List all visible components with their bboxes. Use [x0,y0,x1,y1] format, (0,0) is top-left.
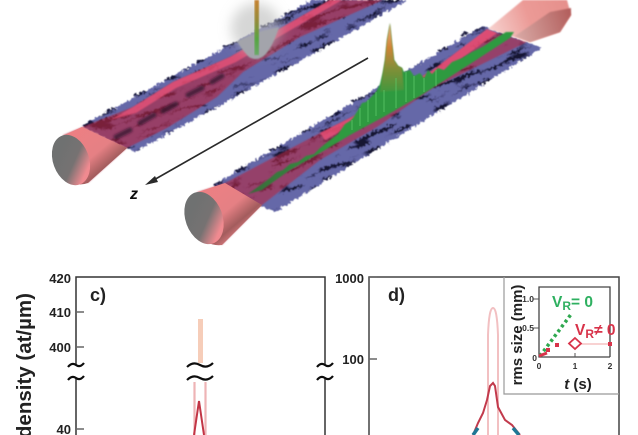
panel d: log density chart [335,271,619,435]
label VR = 0: = 0 [571,294,593,311]
arrow: z axis [145,58,368,185]
panel label c: c) [90,285,106,305]
y axis labels: 400 [49,340,71,355]
green profile ridges [352,70,436,130]
inset x tick labels: 2 [608,361,613,371]
inset panel [504,277,619,394]
beam exit flare [488,0,571,42]
blue density strip with noise [212,26,542,212]
experimental points [473,428,519,435]
panel c: density chart [13,271,333,435]
evolved density curve [473,383,520,435]
y axis ticks [76,312,84,429]
initial density curve [488,308,498,435]
beam end cap [45,129,97,191]
panel: lower atom cloud strip [184,0,572,246]
inset y tick labels: 1.0 [522,294,534,304]
y axis labels: 100 [342,352,364,367]
gray dip [237,27,279,59]
inset x axis title: t (s) [564,376,592,393]
bright stripe on tube [110,0,342,120]
inset y axis title: rms size (mm) [509,285,526,385]
panel: upper atom cloud strip [52,0,407,186]
y axis ticks [369,277,377,359]
inset axes [539,287,610,357]
label VR not 0: V [575,322,585,339]
axes frame [369,277,619,435]
laser beam tube [177,0,571,250]
beam end cap [177,186,231,250]
y axis labels: 1000 [335,271,364,286]
label VR = 0: R [562,299,571,313]
inset x tick labels [537,361,613,371]
red diamond marker [569,338,581,349]
dark blobs inside tube [116,76,222,137]
y axis labels [335,271,364,367]
axes frame [76,277,325,435]
y axis labels: 410 [49,305,71,320]
beam entrance cone [62,127,127,184]
blue density strip with noise [82,0,407,153]
axis label z: z [129,186,138,203]
y axis title: density (at/µm) [13,293,36,435]
density peak tip [380,23,404,92]
label VR not 0: ≠ 0 [594,322,615,339]
initial density peak upper part [198,319,203,363]
label VR = 0: V [552,294,562,311]
inset x tick labels: 1 [573,361,578,371]
inset background [504,277,619,394]
laser beam tube [45,0,383,191]
evolved density curve [194,401,204,435]
inset x tick labels: 0 [537,361,542,371]
inset y tick labels: 0 [532,353,537,363]
initial density peak lower legs [194,382,206,435]
density peak stem [254,0,259,55]
bright stripe on tube [320,29,497,140]
label VR not 0: R [585,327,594,341]
red series points [539,342,612,356]
inset y tick labels [522,294,537,363]
panel label d: d) [388,285,405,305]
beam entrance cone [195,183,262,245]
axis break marks [68,363,333,380]
y axis labels [49,271,71,435]
gaussian dip halo [231,3,281,53]
green series [540,313,572,356]
y axis labels: 420 [49,271,71,286]
red series line [575,343,610,345]
inset y tick labels: 0.5 [522,323,534,333]
green density profile [248,23,514,194]
inset ticks [533,299,575,357]
